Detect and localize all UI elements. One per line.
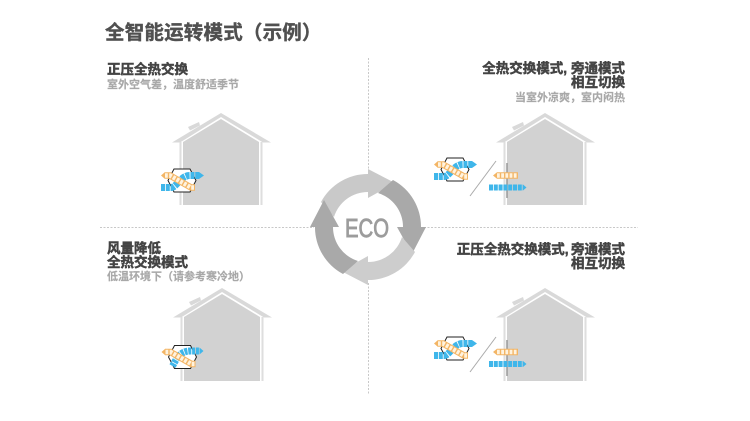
icon: house xyxy=(172,113,271,205)
heading: positive pressure heat exchange: 正压全热交换 xyxy=(107,61,188,77)
icon: bypass gate xyxy=(506,163,508,198)
arrow: bypass exhaust xyxy=(493,172,518,179)
icon: heat exchanger airflow xyxy=(162,346,204,368)
arrow: left xyxy=(310,200,358,274)
note: top-left condition: 室外空气差，温度舒适季节 xyxy=(107,77,239,91)
heading: heat exchange mode: 全热交换模式 xyxy=(107,254,188,270)
arrow: top xyxy=(321,169,395,217)
title: 全智能运转模式（示例） xyxy=(105,21,322,44)
label: ECO: ECO xyxy=(345,213,389,243)
arrow: bypass supply xyxy=(489,184,526,190)
icon: house xyxy=(173,288,272,381)
note: top-right condition: 当室外凉爽，室内闷热 xyxy=(515,90,625,104)
divider: or slash xyxy=(470,161,496,196)
icon: house xyxy=(496,288,595,381)
arrow: bypass exhaust xyxy=(493,349,518,355)
arrow: bottom xyxy=(341,237,415,285)
divider: or slash xyxy=(470,337,496,372)
heading: positive pressure and bypass switching: 正压全热交换模式,旁通模式 xyxy=(457,241,625,257)
icon: house xyxy=(496,113,595,205)
heading: second line: 相互切换 xyxy=(571,255,625,271)
heading: second line: 相互切换 xyxy=(571,74,625,90)
icon: heat exchanger airflow xyxy=(434,158,477,181)
arrow: bypass supply xyxy=(489,361,526,367)
icon: heat exchanger airflow xyxy=(434,337,477,360)
arrow: right xyxy=(378,180,426,254)
icon: heat exchanger airflow xyxy=(161,169,204,192)
panel: top-left mode xyxy=(107,61,271,205)
panel: bottom-left mode xyxy=(107,240,272,381)
note: bottom-left condition: 低温环境下（请参考寒冷地） xyxy=(107,269,250,283)
panel: top-right mode xyxy=(434,60,625,205)
icon: bypass gate xyxy=(506,340,508,376)
panel: bottom-right mode xyxy=(434,241,625,381)
heading: reduced air volume: 风量降低 xyxy=(107,240,161,256)
chart: ECO cycle xyxy=(310,169,426,285)
heading: heat exchange and bypass switching: 全热交换模式, 旁通模式 xyxy=(482,60,625,76)
